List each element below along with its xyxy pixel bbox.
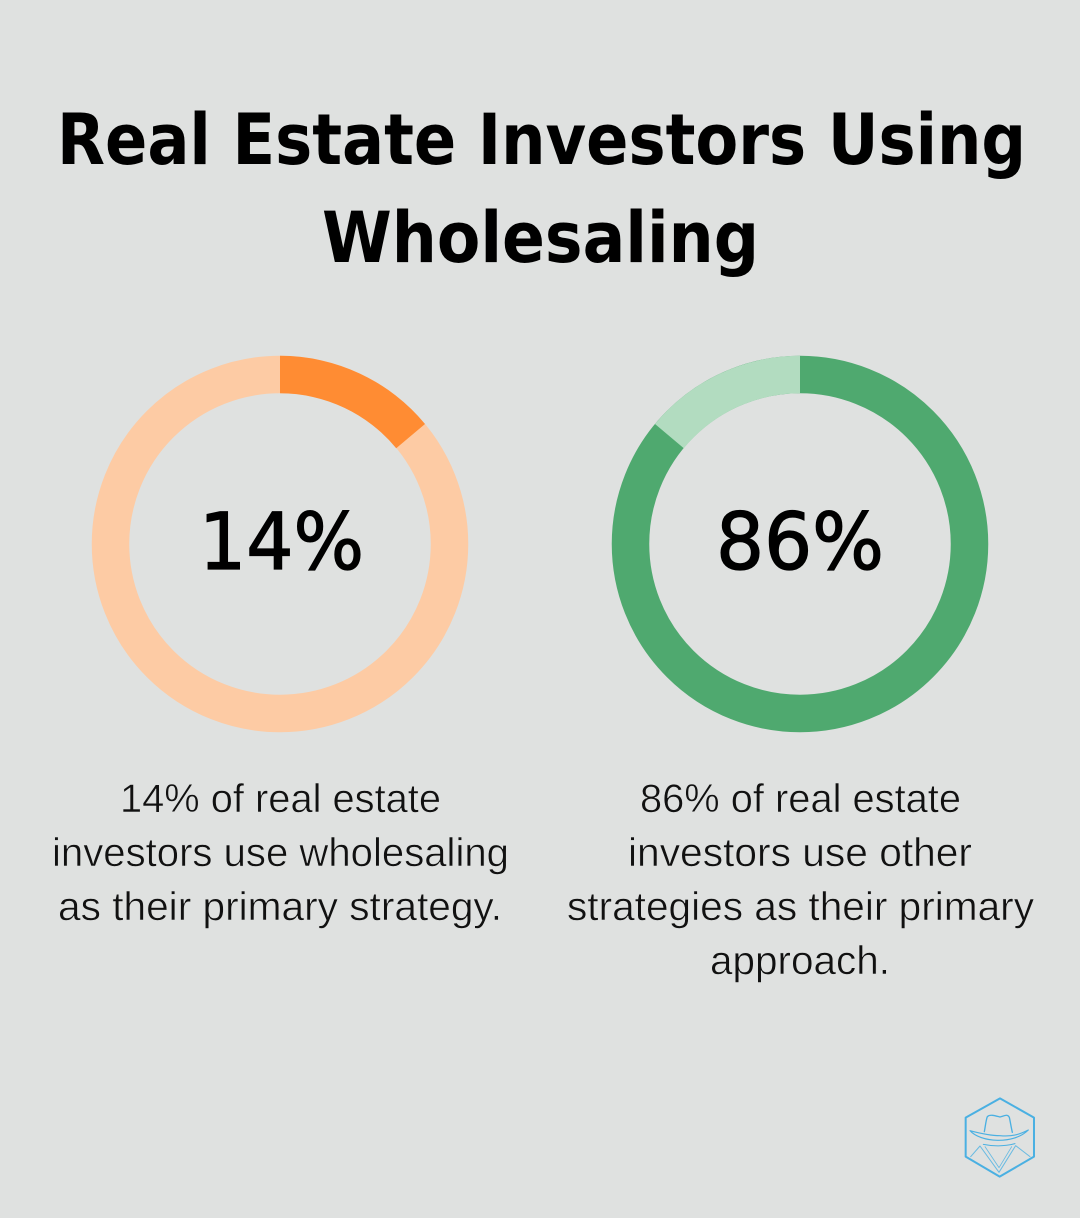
title: Wholesaling xyxy=(322,197,759,279)
text block: wholesaling description: 14% of real estate xyxy=(120,777,441,821)
text block: wholesaling description xyxy=(52,777,509,929)
donut chart: 86% other strategies xyxy=(630,356,970,714)
donut segment: remaining 14% xyxy=(655,356,800,448)
text block: other strategies description xyxy=(567,777,1034,983)
text block: other strategies description: 86% of real estate xyxy=(640,777,961,821)
title xyxy=(57,99,1026,279)
text block: other strategies description: strategies as their primary xyxy=(567,885,1034,929)
donut chart: 14% wholesaling xyxy=(110,356,450,714)
donut segment: 14% xyxy=(280,356,425,448)
donut value: 14%: 14% xyxy=(199,498,364,588)
text block: wholesaling description: investors use wholesaling xyxy=(52,831,509,875)
text block: other strategies description: approach. xyxy=(710,939,890,983)
icon: hat logo xyxy=(966,1098,1034,1177)
text block: wholesaling description: as their primary strategy. xyxy=(58,885,502,929)
donut value: 86%: 86% xyxy=(716,498,884,588)
text block: other strategies description: investors use other xyxy=(628,831,972,875)
